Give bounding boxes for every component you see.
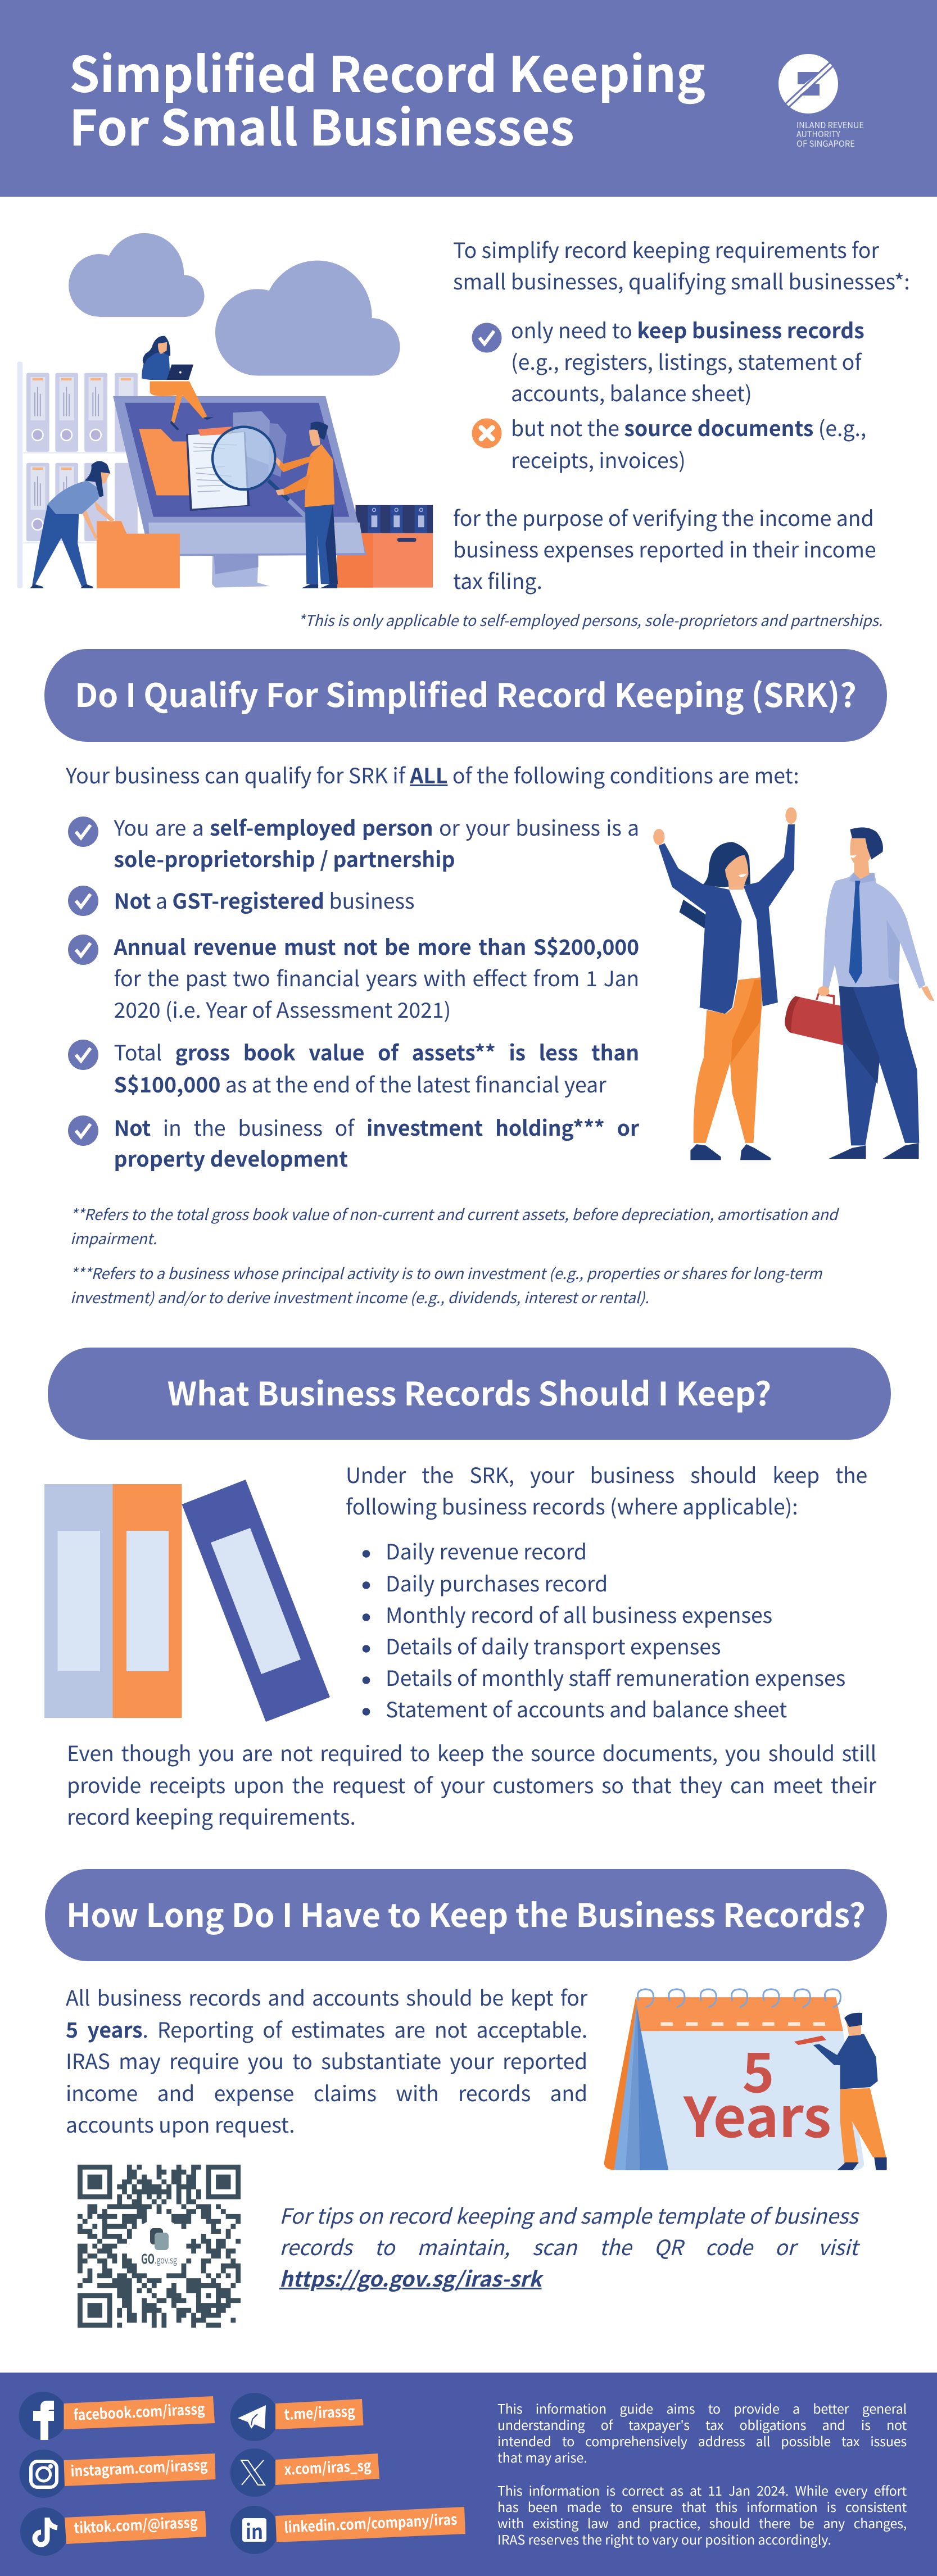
social: X: x.com/iras_sg [284,2455,372,2479]
text: tips and link [279,2199,860,2293]
text: records intro: following business records (where applicable): [346,1490,798,1521]
icon: IRAS logo: OF SINGAPORE [796,138,855,149]
disclaimer paragraph [497,2398,907,2466]
text: keep business records: (e.g., registers, listings, statement of [511,346,861,376]
cloud left [69,233,205,317]
icon: check 3 [68,935,98,965]
condition 2: Not a GST-registered business [114,885,414,915]
text: tips and link: https://go.gov.sg/iras-srk [279,2262,542,2293]
icon: GO.gov.sg logo: .gov.sg [155,2252,177,2266]
list: records to keep: Details of daily transport expenses [386,1630,721,1661]
social: Instagram [20,2450,215,2498]
text: keep business records [511,314,864,407]
icon: IRAS logo: INLAND REVENUE [796,119,864,131]
footnote: applicability: *This is only applicable to self-employed persons, sole-proprietors and partnerships. [298,609,882,631]
illustration: calendar with person [604,1989,887,2170]
calendar text: 5 [742,2029,775,2108]
heading pill: how long [45,1869,887,1961]
condition 1: sole-proprietorship / partnership [114,843,455,873]
text: retention period: 5 years. Reporting of estimates are not acceptable. [66,2013,587,2044]
social: LinkedIn [230,2506,465,2554]
condition 3: 2020 (i.e. Year of Assessment 2021) [114,994,451,1024]
list: records to keep: Daily purchases record [386,1567,608,1598]
text: intro lead-in: small businesses, qualifying small businesses*: [453,265,910,296]
disclaimer paragraph: understanding of taxpayer's tax obligations and is not [497,2415,907,2434]
social: TikTok [20,2507,206,2556]
text: not the source documents: receipts, invoices) [511,444,686,474]
disclaimer paragraph: intended to comprehensively address all possible tax issues [497,2431,907,2450]
social: X [230,2448,379,2497]
heading pill: what records [48,1348,891,1440]
text: records intro [346,1459,867,1521]
icon: orange cross [472,418,501,448]
text: not the source documents [511,412,866,474]
text: purpose [453,502,876,595]
heading pill: do I qualify [44,649,887,742]
footnote: gross book value: impairment. [70,1227,157,1249]
folder front [97,521,180,588]
text: keep business records: only need to keep business records [511,314,864,344]
calendar text: Years [683,2074,831,2153]
list: records to keep: Daily revenue record [386,1535,587,1566]
text: tips and link: For tips on record keeping and sample template of business [279,2199,858,2230]
text: retention period: All business records and accounts should be kept for [66,1981,587,2012]
icon: IRAS logo: AUTHORITY [796,128,840,140]
title [69,36,705,160]
text: receipts note: Even though you are not required to keep the source documents, you should still [67,1737,876,1767]
heading pill: do I qualify: Do I Qualify For Simplified Record Keeping (SRK)? [75,669,857,716]
text: qualify intro: Your business can qualify for SRK if ALL of the following conditions are met: [66,759,799,790]
text: purpose: for the purpose of verifying the income and [453,502,874,532]
QR code [78,2165,241,2328]
footnote: investment holding: investment) and/or to derive investment income (e.g., dividends, interest or rental). [70,1286,649,1308]
social: Facebook: facebook.com/irassg [73,2398,206,2425]
list: records to keep [386,1535,845,1724]
condition 4: Total gross book value of assets** is less than [114,1036,639,1067]
currency of information paragraph: IRAS reserves the right to vary our position accordingly. [497,2529,831,2548]
icon: check 2 [68,886,98,916]
footnote: gross book value [70,1203,839,1249]
icon: IRAS logo [778,54,864,149]
currency of information paragraph: with existing law and practice, should there be any changes, [497,2513,907,2532]
magnifying glass [212,427,311,521]
text: keep business records: accounts, balance sheet) [511,377,752,407]
icon: check 4 [68,1040,98,1070]
text: retention period: income and expense claims with records and [66,2077,587,2107]
woman with laptop [142,336,214,430]
footnote: gross book value: **Refers to the total gross book value of non-current and current assets, before depreciation, amortisation and [70,1203,838,1224]
cabinet right [337,505,433,588]
icon: GO.gov.sg logo: GO [141,2248,155,2267]
list: records to keep: Details of monthly staff remuneration expenses [386,1662,845,1692]
illustration: three binders [44,1480,330,1722]
condition 4 [114,1036,639,1099]
title: Simplified Record Keeping [69,36,705,107]
text: receipts note: provide receipts upon the request of your customers so that they can meet their [67,1769,876,1799]
calendar rings [638,1989,840,2007]
calendar body [604,1997,864,2170]
condition 5 [114,1112,640,1173]
icon: check 1 [68,817,98,847]
social: Telegram: t.me/irassg [284,2400,356,2424]
man with magnifier [276,421,338,588]
header band [0,0,937,197]
icon: blue check [472,323,501,353]
condition 5: property development [114,1142,348,1173]
text: tips and link: records to maintain, scan the QR code or visit [279,2231,858,2261]
condition 3: Annual revenue must not be more than S$200,000 [114,931,639,961]
text: retention period [66,1981,588,2139]
text: receipts note: record keeping requirements. [67,1801,356,1831]
calendar text [683,2029,831,2153]
illustration: people, monitor, folders and clouds [17,233,433,588]
disclaimer paragraph: that may arise. [497,2447,587,2466]
social: TikTok: tiktok.com/@irassg [74,2511,198,2538]
text: intro lead-in [453,234,910,296]
footnote: investment holding: ***Refers to a business whose principal activity is to own investment (e.g., properties or shares for long-term [70,1262,822,1284]
title: For Small Businesses [69,89,574,160]
footnote: investment holding [70,1262,822,1308]
list: records to keep: Monthly record of all business expenses [386,1599,772,1629]
woman at folder [30,461,115,588]
illustration: two people celebrating [653,808,934,1160]
currency of information paragraph: This information is correct as at 11 Jan 2024. While every effort [497,2480,907,2500]
social: LinkedIn: in [246,2516,263,2545]
condition 3: for the past two financial years with effect from 1 Jan [114,962,639,992]
social: Facebook [19,2392,215,2440]
back documents [233,411,287,477]
person with pencil [794,2013,887,2170]
heading pill: what records: What Business Records Should I Keep? [168,1368,771,1415]
text: intro lead-in: To simplify record keeping requirements for [453,234,879,264]
list bullets [363,1550,370,1716]
footer band [0,2373,937,2576]
text: receipts note [67,1737,877,1831]
woman [653,808,797,1160]
condition 3 [114,931,639,1024]
monitor [113,396,366,588]
condition 1 [114,811,639,873]
list: records to keep: Statement of accounts and balance sheet [386,1693,787,1724]
icon: check 5 [68,1115,98,1146]
currency of information paragraph [497,2480,907,2548]
screen folder [139,429,191,495]
man with briefcase [785,827,934,1159]
heading pill: how long: How Long Do I Have to Keep the Business Records? [66,1889,866,1936]
cloud right [215,261,400,376]
text: purpose: tax filing. [453,565,542,595]
clipboard [186,427,250,511]
disclaimer paragraph: This information guide aims to provide a better general [497,2398,907,2418]
text: records intro: Under the SRK, your business should keep the [346,1459,867,1489]
condition 1: You are a self-employed person or your business is a [114,811,639,842]
text: retention period: accounts upon request. [66,2108,295,2139]
text: not the source documents: but not the source documents (e.g., [511,412,866,442]
condition 4: S$100,000 as at the end of the latest financial year [114,1068,606,1099]
text: purpose: business expenses reported in their income [453,533,876,564]
text: retention period: IRAS may require you to substantiate your reported [66,2045,587,2075]
social: Telegram [230,2393,363,2441]
social: LinkedIn: linkedin.com/company/iras [284,2509,458,2537]
binder shelves [17,362,138,588]
condition 5: Not in the business of investment holding*** or [114,1112,639,1142]
currency of information paragraph: has been made to ensure that this information is consistent [497,2497,907,2516]
social: Instagram: instagram.com/irassg [70,2454,209,2481]
icon: GO.gov.sg logo [141,2228,177,2267]
